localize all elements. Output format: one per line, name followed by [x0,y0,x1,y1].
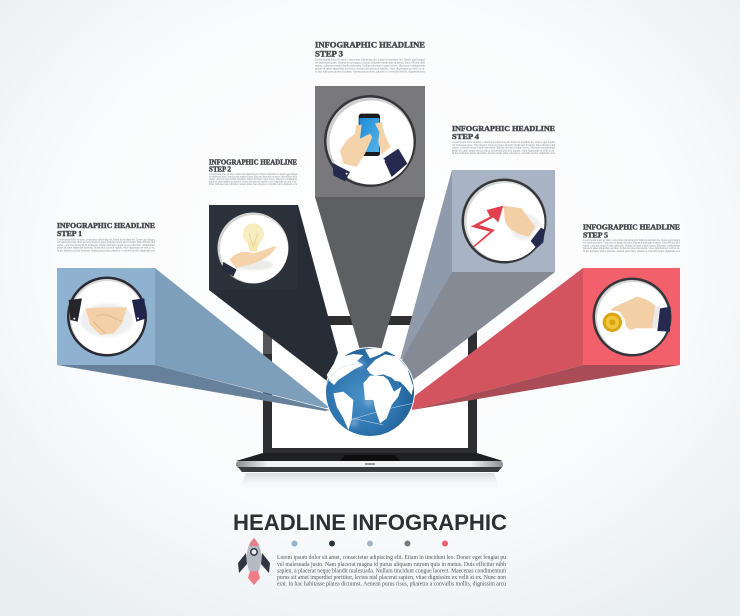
text block: step 4: Lorem ipsum dolor sit amet, consectetur adipiscing elit. Etiam in tincidunt leo. Donec eget feugiat [452,140,555,144]
text block: step 1: STEP 1 [57,230,83,238]
panel: step 5 red beam [412,268,680,410]
text block: step 5: vel malesuada justo. Nam placerat magna id purus aliquam rutrum quis in metus. Duis efficitur nibh [583,242,681,245]
icon: hand holding coin [592,278,672,356]
text block: step 5 [583,224,681,253]
text block: step 1: sapien, a placerat neque blandit malesuada. Nullam tincidunt congue laoreet. Maecenas condimentum [57,244,156,247]
globe [325,347,415,437]
text block: step 5: INFOGRAPHIC HEADLINE [583,224,680,232]
text block: main description: sapien, a placerat neque blandit malesuada. Nullam tincidunt congue laoreet. Maecenas condimentum [277,568,506,574]
legend dots [292,540,448,546]
text block: step 5: Lorem ipsum dolor sit amet, consectetur adipiscing elit. Etiam in tincidunt leo. Donec eget feugiat [583,239,680,242]
text block: step 3: STEP 3 [315,50,343,58]
text block: step 4: INFOGRAPHIC HEADLINE [452,124,555,133]
text block: step 2: STEP 2 [209,166,232,174]
text block: main description: vel malesuada justo. Nam placerat magna id purus aliquam rutrum quis in metus. Duis efficitur nibh [277,561,506,568]
text block: step 2 [209,160,298,186]
text block: step 1: purus sit amet imperdiet porttitor, lectus nisl placerat sapien, vitae dignissim ex velit at ex. [57,247,155,250]
text block: step 2: vel malesuada justo. Nam placerat magna id purus aliquam rutrum quis in metus. Duis efficitur nibh [209,176,298,178]
text block: step 4: purus sit amet imperdiet porttitor, lectus nisl placerat sapien, vitae dignissim ex velit at ex. [452,148,555,152]
text block: main description: Lorem ipsum dolor sit amet, consectetur adipiscing elit. Etiam in tincidunt leo. Donec eget feugiat pu [277,554,506,561]
text block: step 2: In hac habitasse platea dictumst. Aenean purus risus, pharetra a convallis mollis, dignissim arcu [209,183,298,186]
text block: step 1: vel malesuada justo. Nam placerat magna id purus aliquam rutrum quis in metus. Duis efficitur nibh [57,241,156,244]
text block: step 2: Lorem ipsum dolor sit amet, consectetur adipiscing elit. Etiam in tincidunt leo. Donec eget feugiat [209,173,297,176]
text block: step 1: INFOGRAPHIC HEADLINE [57,222,155,230]
text block: step 3: Lorem ipsum dolor sit amet, consectetur adipiscing elit. Etiam in tincidunt leo. Donec eget feugiat [315,58,425,62]
panel: step 4 blue-grey beam [400,170,555,380]
icon: handshake [67,276,147,356]
text block: step 1: In hac habitasse platea dictumst. Aenean purus risus, pharetra a convallis mollis, dignissim arcu [57,249,156,252]
text block: step 2: INFOGRAPHIC HEADLINE [209,160,297,166]
text block: step 4: In hac habitasse platea dictumst. Aenean purus risus, pharetra a convallis mollis, dignissim arcu [452,151,556,155]
icon: hand on smartphone [324,95,416,187]
laptop [236,316,503,490]
title: HEADLINE INFOGRAPHIC [233,510,507,535]
text block: main description: erat. In hac habitasse platea dictumst. Aenean purus risus, pharetra a convallis mollis, dignissim arcu [277,582,506,588]
text block: step 5: purus sit amet imperdiet porttitor, lectus nisl placerat sapien, vitae dignissim ex velit at ex. [583,247,680,250]
text block: step 1: Lorem ipsum dolor sit amet, consectetur adipiscing elit. Etiam in tincidunt leo. Donec eget feugiat [57,238,155,242]
text block: step 5: sapien, a placerat neque blandit malesuada. Nullam tincidunt congue laoreet. Maecenas condimentum [583,244,681,247]
text block: step 3: In hac habitasse platea dictumst. Aenean purus risus, pharetra a convallis mollis, dignissim arcu [315,70,425,74]
text block: step 1 [57,222,156,252]
text block: step 4: vel malesuada justo. Nam placerat magna id purus aliquam rutrum quis in metus. Duis efficitur nibh [452,143,555,147]
panel: step 2 dark beam [209,205,338,381]
text block: step 4: STEP 4 [452,132,479,141]
text block: step 2: sapien, a placerat neque blandit malesuada. Nullam tincidunt congue laoreet. Maecenas condimentum [209,178,297,181]
text block: step 4: sapien, a placerat neque blandit malesuada. Nullam tincidunt congue laoreet. Maecenas condimentum [452,146,556,150]
text block: step 3: INFOGRAPHIC HEADLINE [315,40,425,50]
text block: step 2: purus sit amet imperdiet porttitor, lectus nisl placerat sapien, vitae dignissim ex velit at ex. [209,180,297,184]
icon: hand with red arrow [462,178,546,264]
text block: step 3 [315,40,426,74]
icon: hand holding light bulb [218,212,288,284]
text block: step 5: In hac habitasse platea dictumst. Aenean purus risus, pharetra a convallis mollis, dignissim arcu [583,250,681,253]
panel: step 1 blue beam [57,268,330,411]
icon: rocket [238,538,270,585]
panel: step 3 grey beam [315,86,425,350]
text block: step 3: purus sit amet imperdiet porttitor, lectus nisl placerat sapien, vitae dignissim ex velit at ex. [315,66,425,72]
text block: step 4 [452,124,556,155]
text block: step 5: STEP 5 [583,232,608,240]
text block: step 3: sapien, a placerat neque blandit malesuada. Nullam tincidunt congue laoreet. Maecenas condimentum [315,64,426,68]
text block: main description: purus sit amet imperdiet porttitor, lectus nisl placerat sapien, vitae dignissim ex velit at ex. Nunc non [277,575,506,581]
text block: step 3: vel malesuada justo. Nam placerat magna id purus aliquam rutrum quis in metus. Duis efficitur nibh [315,60,425,64]
